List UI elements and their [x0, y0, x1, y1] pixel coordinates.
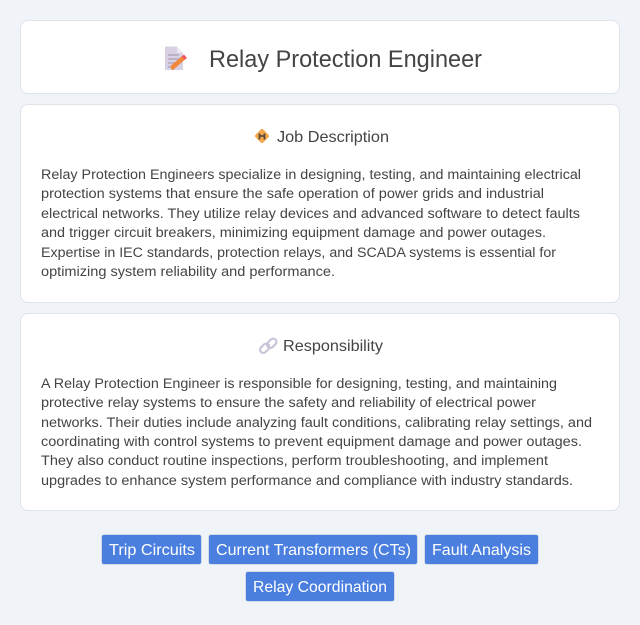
title: Relay Protection Engineer [209, 46, 482, 73]
tag labels: Current Transformers (CTs) [216, 542, 411, 559]
tag labels: Relay Coordination [253, 579, 387, 596]
tag labels: Trip Circuits [109, 542, 195, 559]
text: job description [41, 167, 581, 280]
text: job description: Expertise in IEC standards, protection relays, and SCADA systems is essential for [41, 245, 556, 261]
text: job description: electrical networks. They utilize relay devices and advanced software to detect faults [41, 206, 580, 222]
text: job description: Relay Protection Engineers specialize in designing, testing, and maintaining electrical [41, 167, 581, 183]
panel: job description card [20, 104, 620, 303]
text: responsibility: networks. Their duties include analyzing fault conditions, calibrating relay settings, and [41, 415, 592, 431]
heading: Job Description: Job Description [277, 129, 389, 146]
tag: Trip Circuits [101, 534, 202, 565]
text: job description: optimizing system reliability and performance. [41, 264, 335, 280]
text: responsibility: coordinating with control systems to prevent equipment damage and power outages. [41, 434, 582, 450]
text: responsibility: protective relay systems to ensure the safety and reliability of electrical power [41, 395, 536, 411]
text: responsibility: They also conduct routine inspections, perform troubleshooting, and implement [41, 453, 548, 469]
tag: Current Transformers (CTs) [208, 534, 418, 565]
icon: diamond warning sign [254, 128, 270, 144]
text: job description: and trigger circuit breakers, minimizing equipment damage and power outages. [41, 225, 546, 241]
text: job description: protection systems that ensure the safe operation of power grids and industrial [41, 186, 544, 202]
tag: Relay Coordination [245, 571, 395, 602]
heading: Responsibility: Responsibility [283, 338, 383, 355]
panel: responsibility card [20, 313, 620, 511]
tag: Fault Analysis [424, 534, 539, 565]
icon: chain link [259, 337, 278, 354]
text: responsibility: upgrades to enhance system performance and compliance with industry standards. [41, 473, 573, 489]
text: responsibility: A Relay Protection Engineer is responsible for designing, testing, and maintaining [41, 376, 557, 392]
panel: title card [20, 20, 620, 94]
icon: document with pencil [165, 46, 187, 70]
tag labels [109, 542, 531, 596]
text: responsibility [41, 376, 592, 489]
tag labels: Fault Analysis [432, 542, 531, 559]
